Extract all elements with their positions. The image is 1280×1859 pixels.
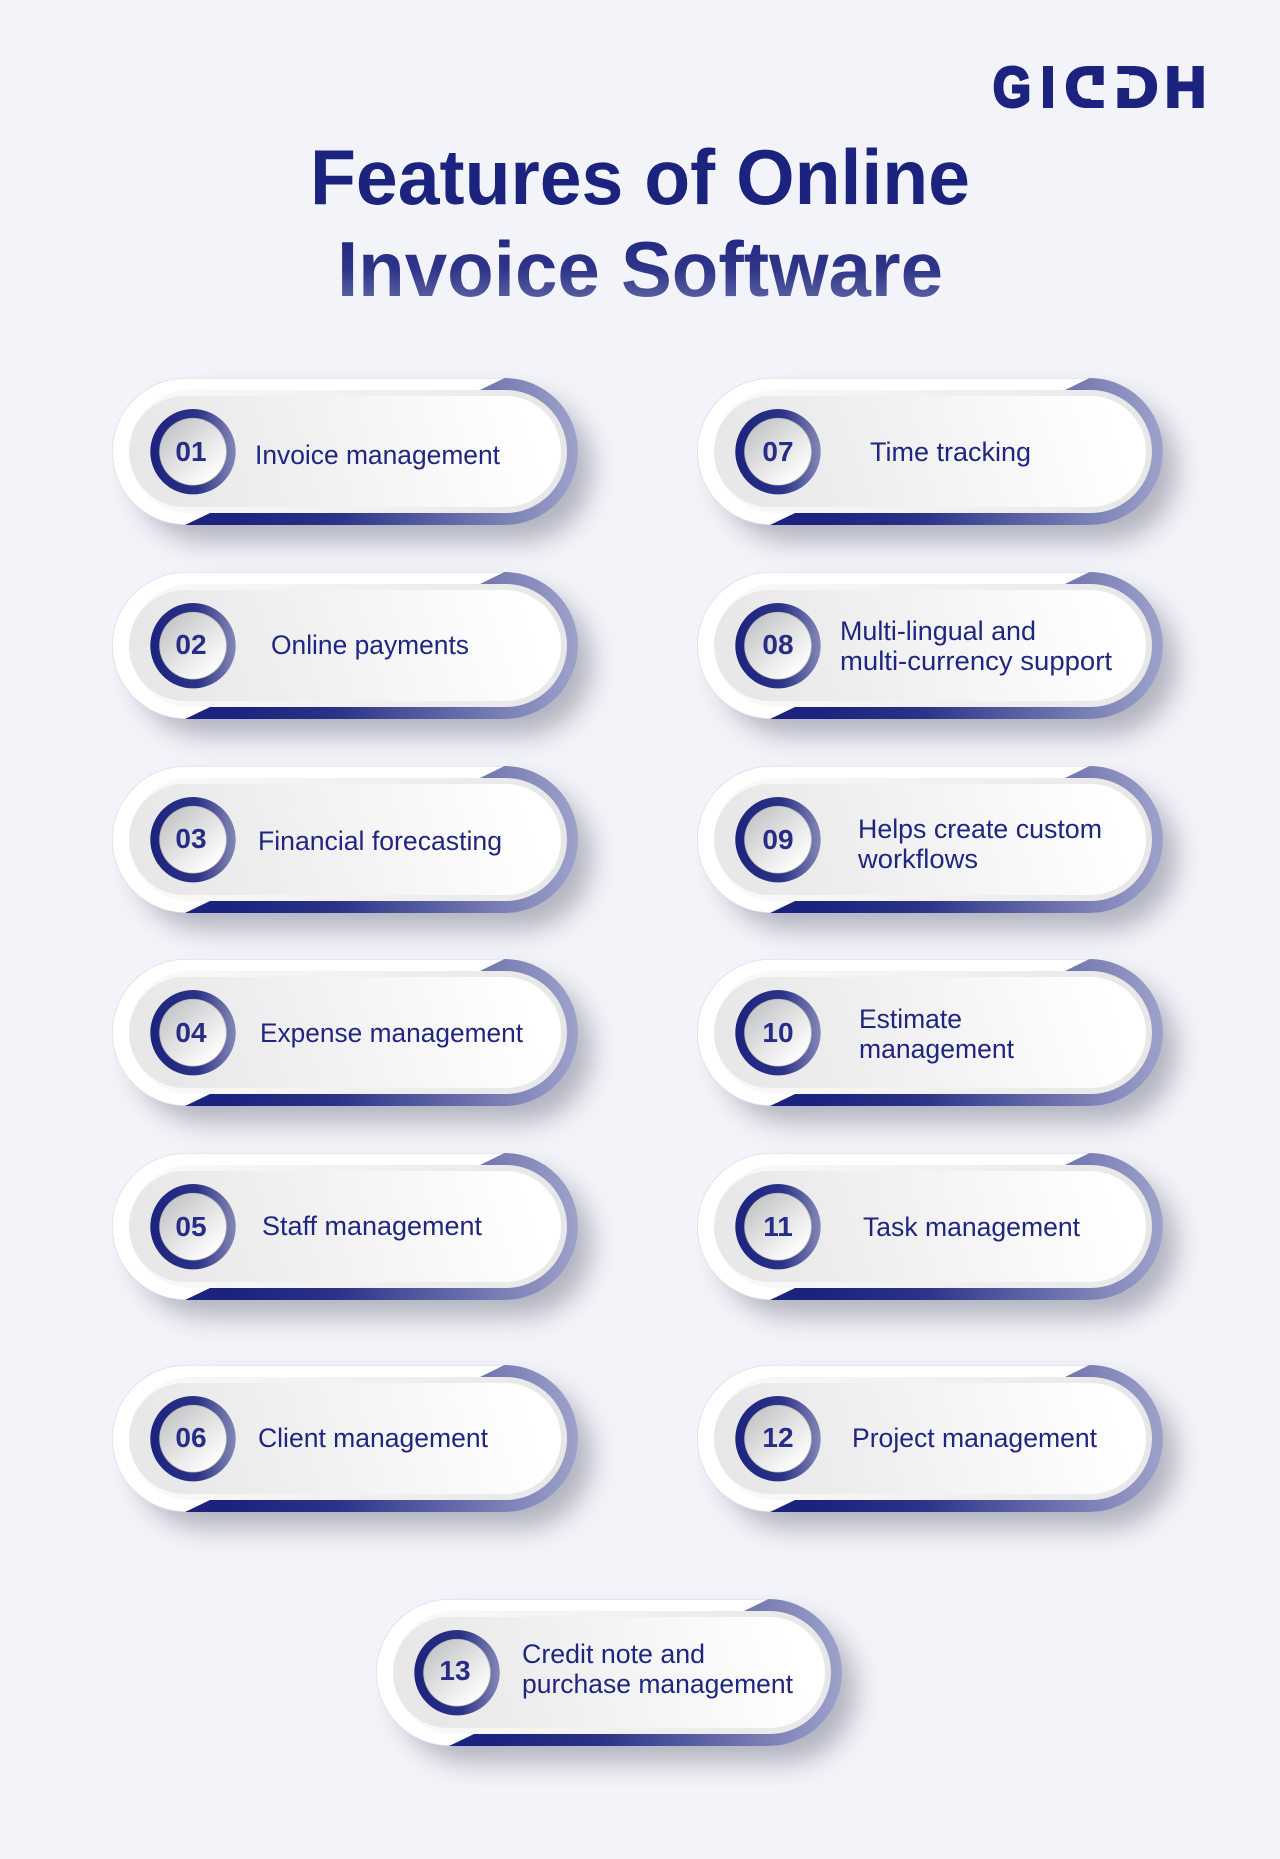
pill 04: 04 (175, 1017, 207, 1048)
logo: GIDDH: H (1165, 56, 1206, 120)
title (310, 133, 970, 313)
pill 01: 01 (175, 436, 207, 467)
pill 09: workflows (857, 844, 978, 874)
pill 13 (376, 1599, 856, 1763)
pill 05 (112, 1153, 592, 1317)
pill 03: Financial forecasting (258, 826, 502, 856)
pill 09: 09 (762, 824, 794, 855)
pill 12: 12 (762, 1422, 794, 1453)
pill 10 (697, 959, 1177, 1123)
pill 11: 11 (763, 1211, 793, 1242)
pill 04: Expense management (260, 1018, 523, 1048)
title: Features of Online (310, 133, 970, 221)
pill 07: Time tracking (870, 437, 1031, 467)
pill 13: 13 (439, 1655, 471, 1686)
pill 02: 02 (175, 629, 207, 660)
pill 13: purchase management (522, 1669, 793, 1699)
pill 11 (697, 1153, 1177, 1317)
pill 05: 05 (175, 1211, 207, 1242)
logo: GIDDH: D (1065, 56, 1106, 120)
pill 08 (697, 572, 1177, 736)
pill 12 (697, 1365, 1177, 1529)
pill 10: management (859, 1034, 1014, 1064)
pill 08: Multi-lingual and (840, 616, 1036, 646)
logo: GIDDH: D (1115, 56, 1158, 120)
pill 04 (112, 959, 592, 1123)
pill 09 (697, 766, 1177, 930)
pill 10: Estimate (859, 1004, 962, 1034)
logo: GIDDH (993, 56, 1206, 120)
pill 01: Invoice management (255, 440, 500, 470)
pill 06: 06 (175, 1422, 207, 1453)
pill 07 (697, 378, 1177, 542)
pill 08: 08 (762, 629, 794, 660)
pill 08: multi-currency support (840, 646, 1113, 676)
logo: GIDDH: G (993, 56, 1031, 120)
pill 13: Credit note and (522, 1639, 705, 1669)
pill 05: Staff management (262, 1211, 482, 1241)
pill 09: Helps create custom (858, 814, 1102, 844)
pill 03: 03 (175, 823, 207, 854)
pill 11: Task management (863, 1212, 1080, 1242)
title: Invoice Software (337, 225, 943, 313)
pill 12: Project management (852, 1423, 1097, 1453)
pill 01 (112, 378, 592, 542)
pill 06 (112, 1365, 592, 1529)
pill 06: Client management (258, 1423, 488, 1453)
pill 10: 10 (762, 1017, 794, 1048)
pill 03 (112, 766, 592, 930)
pill 02: Online payments (271, 630, 469, 660)
pill 07: 07 (762, 436, 794, 467)
pill 02 (112, 572, 592, 736)
